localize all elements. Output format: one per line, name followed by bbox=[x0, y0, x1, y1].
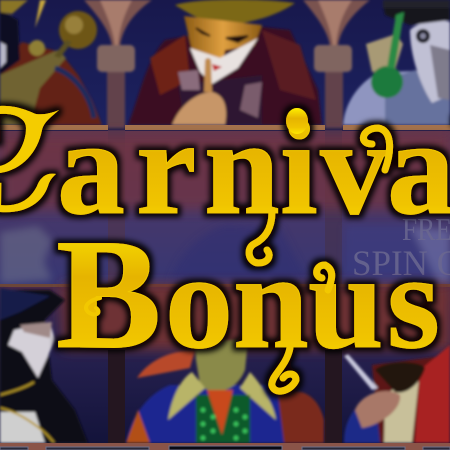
title line: Carnival: a bbox=[57, 93, 125, 243]
figure: masked man in black lower left bbox=[0, 288, 88, 443]
figure: plague doctor with green flask bbox=[343, 0, 450, 125]
letter swashes bbox=[86, 128, 390, 391]
warm tint lower lettering bbox=[62, 284, 450, 350]
bottom strip bbox=[0, 443, 450, 450]
figure: quill writer lower right bbox=[344, 345, 450, 443]
middle pillars bbox=[108, 130, 342, 285]
arch and pillar left bbox=[84, 0, 152, 128]
title line: Carnival: v bbox=[320, 93, 388, 243]
title line: Bonus: s bbox=[387, 227, 440, 377]
title line: Carnival: i bbox=[280, 93, 318, 243]
title line: Bonus: n bbox=[233, 227, 309, 377]
figure: jester top left bbox=[0, 0, 102, 125]
title line: Bonus: B bbox=[56, 207, 161, 382]
title line: Carnival: r bbox=[136, 93, 196, 243]
moulding rail lower bbox=[0, 284, 450, 287]
faded free spins text bbox=[352, 211, 450, 283]
moulding rail upper bbox=[0, 125, 450, 130]
figure: jester in blue lower centre bbox=[126, 340, 324, 443]
warm tint behind lettering bbox=[0, 135, 450, 210]
background: middle faded band bbox=[0, 131, 450, 285]
lower pillars bbox=[108, 350, 342, 444]
background: upper niche band bbox=[0, 0, 450, 127]
title line: Carnival: n bbox=[204, 93, 280, 243]
title line: Bonus: o bbox=[165, 227, 233, 377]
arch and pillar right bbox=[303, 0, 370, 128]
figure: gold mask woman bbox=[128, 0, 322, 125]
background: lower niche band bbox=[0, 284, 450, 444]
faded middle figures bbox=[0, 225, 450, 285]
title line: Bonus: u bbox=[308, 227, 384, 377]
letter C strokes bbox=[0, 106, 59, 212]
dot of letter i bbox=[286, 108, 308, 134]
title: Carnival Bonus bbox=[0, 80, 450, 391]
